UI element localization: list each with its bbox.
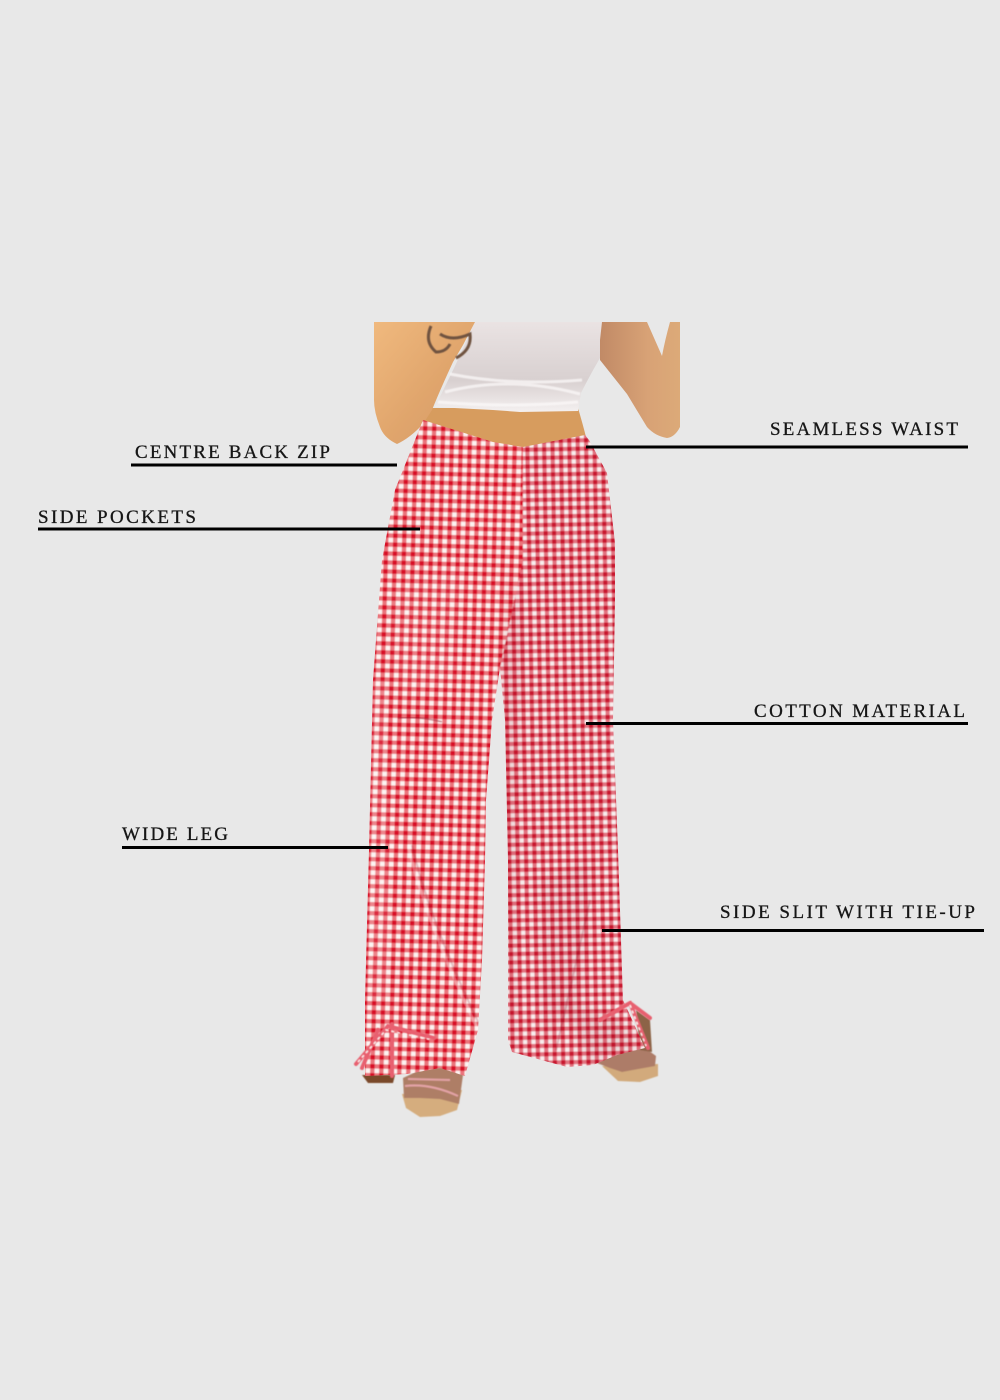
left ankle tie [356, 1024, 434, 1076]
gingham pants [355, 410, 655, 1090]
label: centre back zip: CENTRE BACK ZIP [135, 442, 330, 463]
bracelet [428, 326, 470, 358]
left sandal and foot [362, 1067, 463, 1117]
right ankle tie [600, 1003, 650, 1048]
thigh crease [398, 718, 442, 722]
label: seamless waist [586, 419, 968, 448]
white crop top [430, 322, 613, 412]
label: wide leg [122, 824, 388, 849]
label: cotton material [586, 701, 968, 725]
label: wide leg: WIDE LEG [122, 824, 228, 845]
label: side slit with tie-up: SIDE SLIT WITH TIE-UP [720, 902, 975, 923]
label: centre back zip [131, 442, 397, 466]
midriff [423, 408, 586, 448]
right sandal and foot [597, 1010, 658, 1082]
fold shading [500, 560, 522, 1040]
right arm [600, 322, 680, 438]
model photo: cropped figure wearing gingham pants [38, 322, 984, 1117]
right leg [499, 435, 645, 1067]
left leg seam fold [408, 845, 478, 1030]
left arm [374, 322, 475, 444]
label: side pockets: SIDE POCKETS [38, 507, 196, 528]
right leg fold [556, 900, 590, 1050]
label: side pockets [38, 507, 420, 530]
label: cotton material: COTTON MATERIAL [754, 701, 965, 722]
left leg [355, 410, 523, 1090]
label: seamless waist: SEAMLESS WAIST [770, 419, 958, 440]
label: side slit with tie-up [602, 902, 984, 932]
